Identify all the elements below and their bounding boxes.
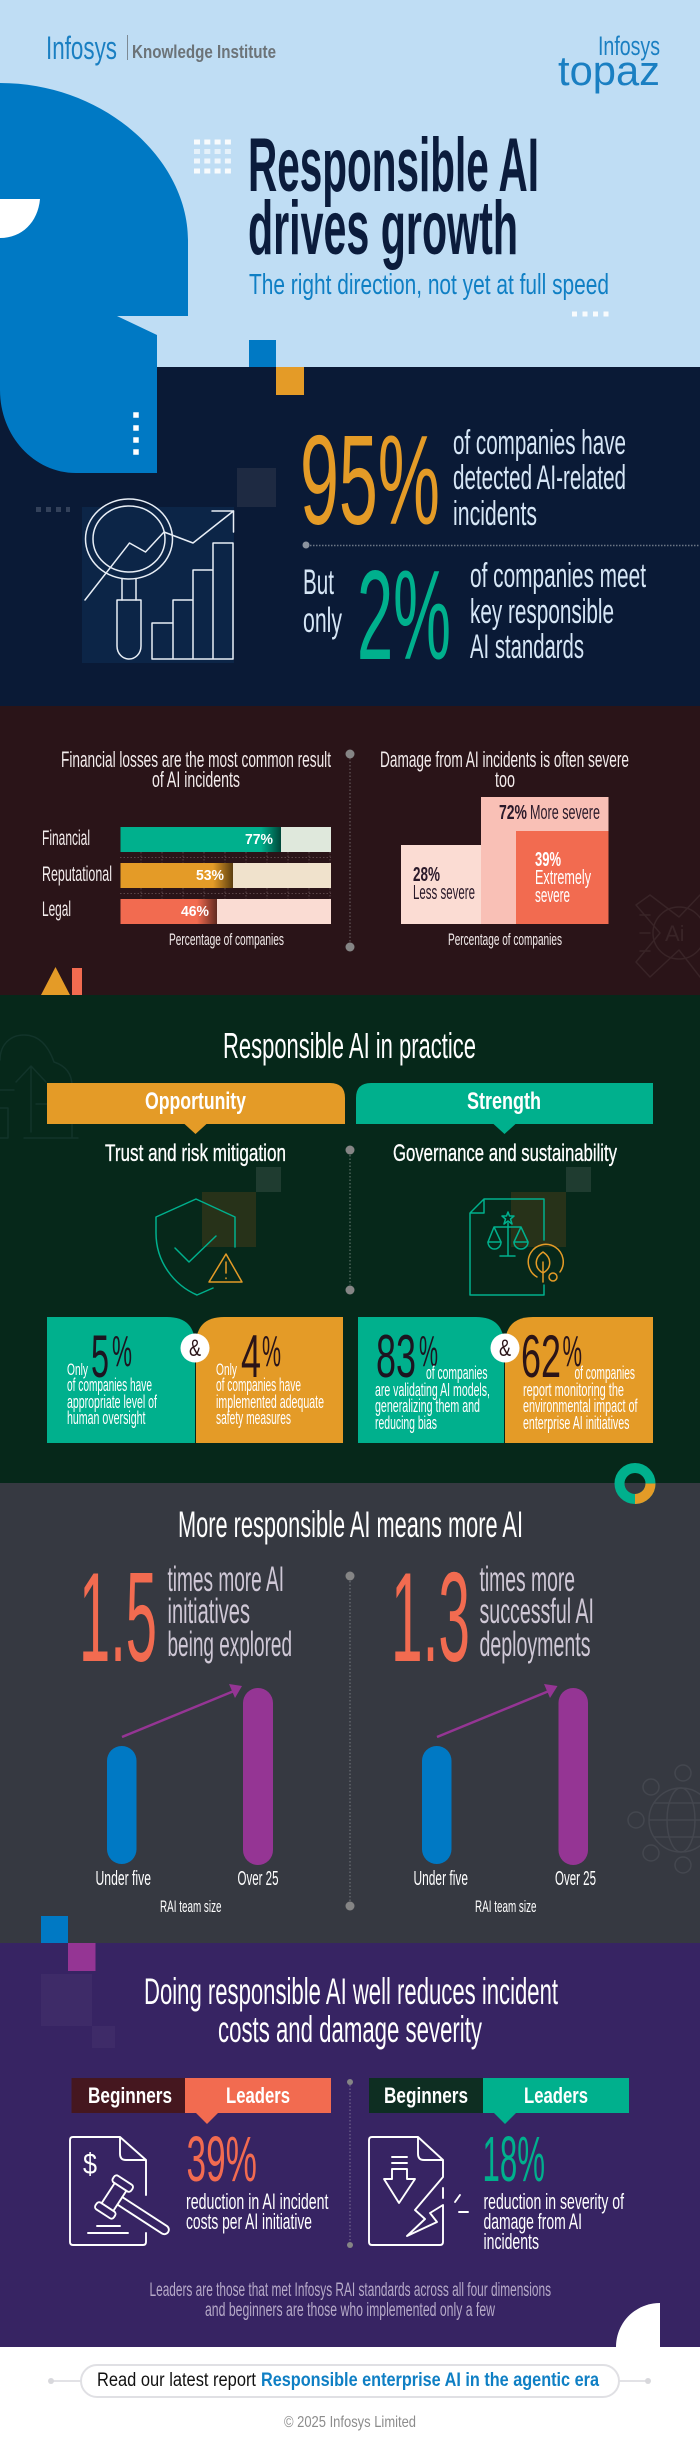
logo: Infosys Knowledge Institute [46,30,276,66]
icon: faint globe network [628,1765,700,1873]
stat card: 4 percent safety measures: safety measures [216,1408,291,1428]
icon: document with dollar and gavel: $ [83,2148,97,2181]
decorative dots [36,507,70,512]
banner: strength [356,1083,653,1134]
stat: 1.3 times more deployments: successful AI [480,1592,594,1631]
heading: costs and damage severity [218,2009,482,2050]
stat: 1.5 times more initiatives: times more AI [168,1560,284,1599]
stat card: 5 percent human oversight: appropriate level of [67,1392,158,1412]
stat: 95 percent: incidents [453,495,537,533]
stat card: 5 percent human oversight: of companies have [67,1375,152,1395]
chart: damage severity blocks: severe [535,885,570,907]
chart: deployments by RAI team size: Over 25 [555,1868,596,1890]
stat card: 83 percent validating models: of companies [426,1363,488,1383]
chart: initiatives by RAI team size: Over 25 [238,1868,278,1890]
decorative triangle and bar [41,967,82,995]
chart heading: financial losses: Financial losses are the most common result [61,747,331,772]
stat: 2 percent [303,544,646,686]
chart: deployments by RAI team size: Under five [414,1868,468,1890]
chart heading: damage severity: too [495,767,515,792]
chart: damage severity blocks: 39% [535,849,561,871]
tabs: beginners and leaders, severity: Leaders [524,2083,588,2108]
chart: damage severity blocks: Extremely [535,867,591,889]
chart: deployments by RAI team size: RAI team size [475,1897,536,1916]
ampersand badge left: & [189,1335,201,1362]
stat card: 83 percent validating models: generalizing them and [375,1396,480,1416]
stat card: 62 percent environmental monitoring: report monitoring the [523,1380,624,1400]
stat: 1.5 times more initiatives: initiatives [168,1592,250,1631]
logo: Infosys topaz: Infosys [598,31,660,61]
stat card: 4 percent safety measures [196,1317,343,1443]
chart heading: financial losses [61,747,331,792]
stat card: 4 percent safety measures: of companies have [216,1375,301,1395]
stat card: 62 percent environmental monitoring: of companies [574,1363,635,1383]
stat: 1.5 times more initiatives: 1.5 [79,1546,157,1688]
stat: 18 percent severity reduction [482,2123,625,2254]
stat card: 62 percent environmental monitoring: % [562,1327,582,1376]
logo: Infosys Knowledge Institute: Knowledge Institute [132,42,276,62]
chart: damage severity blocks [401,797,608,949]
decorative donut on section seam [620,1468,650,1499]
graphic: blue head silhouette [0,83,188,473]
ampersand badge right [490,1334,520,1362]
icon: faint AI chip: Ai [665,921,685,946]
stat: 2 percent: AI standards [470,628,584,666]
stat: 95 percent: 95% [300,409,440,551]
stat card: 4 percent safety measures: 4 [241,1323,261,1390]
stat card: 83 percent validating models: reducing bias [375,1413,437,1433]
panel: more responsible AI means more AI [0,1483,700,1943]
bar chart: AI incident results: Financial [42,827,90,850]
call to action pill: Responsible enterprise AI in the agentic era [261,2370,599,2391]
chart: damage severity blocks: Less severe [413,882,475,904]
stat card: 5 percent human oversight: 5 [91,1323,109,1390]
banner: opportunity: Opportunity [145,1088,246,1115]
chart heading: financial losses: of AI incidents [152,767,240,792]
call to action pill [48,2365,651,2397]
stat: 39 percent cost reduction [186,2123,328,2234]
footer [0,2347,700,2450]
bar chart: AI incident results: Legal [42,898,71,921]
stat card: 83 percent validating models: are validating AI models, [375,1380,490,1400]
logo: Infosys topaz: topaz [558,47,660,94]
call to action pill: Read our latest report [97,2370,257,2391]
stat: 18 percent severity reduction: 18% [482,2123,545,2195]
bar chart: AI incident results: 46% [181,903,209,920]
decorative squares on the section seam [249,340,304,395]
stat card: 4 percent safety measures: implemented adequate [216,1392,324,1412]
chart heading: damage severity [380,747,629,792]
tabs: beginners and leaders, severity: Beginners [384,2083,468,2108]
stat card: 5 percent human oversight [47,1317,195,1443]
stat card: 5 percent human oversight: Only [67,1360,88,1379]
chart: damage severity blocks: 72% [499,802,527,824]
stat: 2 percent: 2% [357,544,451,686]
subheading: trust and risk mitigation: Trust and risk mitigation [105,1140,286,1167]
icon: shield with warning [156,1199,242,1295]
tabs: beginners and leaders, costs: Beginners [88,2083,172,2108]
icon: document with down arrow and lightning [369,2137,468,2245]
chart: initiatives by RAI team size: RAI team size [160,1897,222,1916]
icon: document with dollar and gavel [70,2137,179,2249]
chart: initiatives by RAI team size: Under five [96,1868,151,1890]
banner: opportunity [47,1083,345,1134]
stat card: 62 percent environmental monitoring [505,1317,653,1443]
icon: magnifying glass over bar chart [82,499,234,663]
stat card: 62 percent environmental monitoring: enterprise AI initiatives [523,1413,630,1433]
stat: 18 percent severity reduction: reduction in severity of [484,2189,625,2214]
stat: 1.5 times more initiatives: being explored [168,1625,292,1664]
stat: 2 percent: only [303,601,342,640]
stat: 39 percent cost reduction: 39% [186,2123,257,2195]
logo: Infosys Knowledge Institute: Infosys [46,30,117,66]
decorative white dot grid [194,142,609,314]
definition note [150,2280,551,2321]
bar chart: AI incident results: Reputational [42,863,112,886]
chart: damage severity blocks: More severe [530,802,600,824]
ampersand badge left [180,1334,210,1362]
icon: faint AI chip [636,895,700,977]
stat: 39 percent cost reduction: reduction in AI incident [186,2189,328,2214]
chart: damage severity blocks: 28% [413,864,440,886]
panel: responsible AI in practice [0,995,700,1483]
stat: 2 percent: But [303,563,334,602]
banner: strength: Strength [467,1088,541,1115]
chart: initiatives by RAI team size [96,1684,278,1916]
heading [144,1971,558,2050]
heading: Responsible AI in practice [223,1025,476,1066]
stat: 1.3 times more deployments: 1.3 [391,1546,470,1688]
copyright: © 2025 Infosys Limited [284,2414,416,2431]
definition note: and beginners are those who implemented only a few [205,2300,495,2321]
stat card: 5 percent human oversight: % [112,1327,132,1376]
stat card: 83 percent validating models [358,1317,504,1443]
stat: 18 percent severity reduction: damage from AI [484,2209,582,2234]
stat: 2 percent: key responsible [470,593,614,631]
bar chart: AI incident results [42,827,331,949]
bar chart: AI incident results: Percentage of companies [169,930,284,949]
chart: damage severity blocks: Percentage of companies [448,930,562,949]
stat: 39 percent cost reduction: costs per AI initiative [186,2209,312,2234]
tabs: beginners and leaders, severity [369,2078,629,2124]
stat: 18 percent severity reduction: incidents [484,2229,539,2254]
stat: 1.3 times more deployments: deployments [480,1625,590,1664]
panel: financial losses and severity [0,706,700,995]
panel: statistics on incidents [0,367,700,706]
stat: 1.3 times more deployments: times more [480,1560,575,1599]
tabs: beginners and leaders, costs [72,2078,331,2124]
icon: faint cloud upload [0,1035,78,1138]
decorative squares on purple seam [41,1916,96,1971]
chart: deployments by RAI team size [414,1684,596,1916]
bar chart: AI incident results: 77% [245,831,273,848]
stat card: 83 percent validating models: % [419,1327,438,1376]
ampersand badge right: & [499,1335,511,1362]
stat card: 4 percent safety measures: % [262,1327,281,1376]
bar chart: AI incident results: 53% [196,867,224,884]
tabs: beginners and leaders, costs: Leaders [226,2083,290,2108]
stat card: 83 percent validating models: 83 [376,1323,416,1390]
stat card: 4 percent safety measures: Only [216,1360,237,1379]
title [248,123,539,271]
stat card: 5 percent human oversight: human oversight [67,1408,146,1428]
panel: incident costs and damage severity [0,1943,700,2347]
icon: document with scales and leaf [470,1199,563,1295]
decorative white quarter shape [616,2303,660,2347]
panel: hero header [0,0,700,367]
stat card: 62 percent environmental monitoring: 62 [521,1323,561,1390]
